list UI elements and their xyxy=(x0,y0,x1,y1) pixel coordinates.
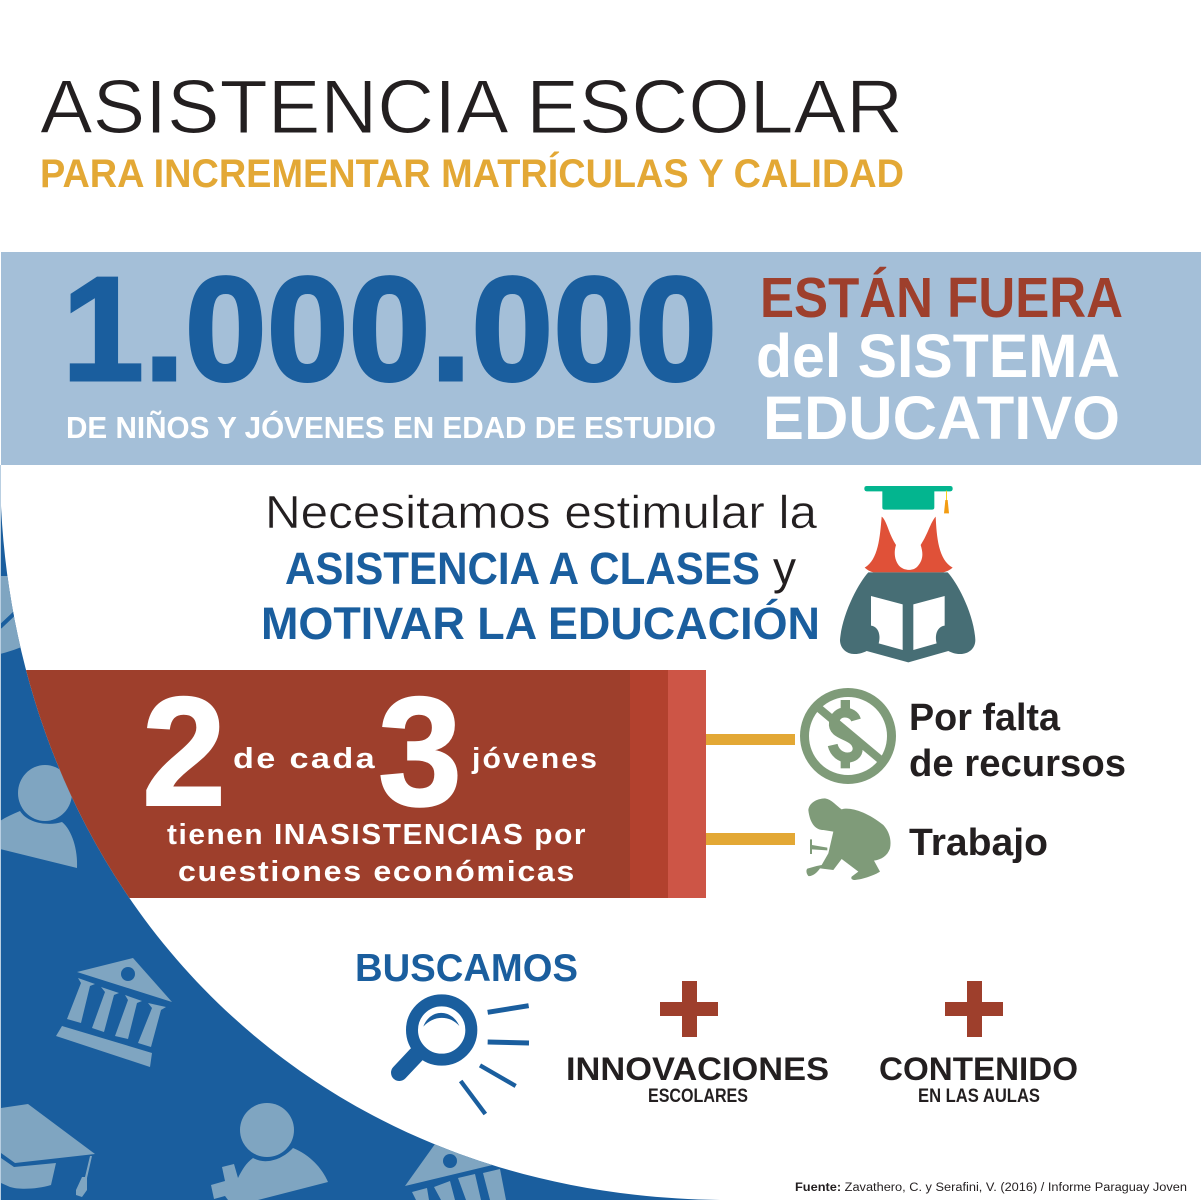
message text block: y xyxy=(773,542,796,594)
panel: two of three youths xyxy=(0,665,706,898)
icon: person left xyxy=(0,765,77,868)
text: por falta de recursos: Por falta xyxy=(909,697,1061,739)
icon: worker xyxy=(806,798,891,880)
band heading: educativo: EDUCATIVO xyxy=(763,384,1120,452)
icon: person with cross xyxy=(211,1103,328,1200)
band caption: DE NIÑOS Y JÓVENES EN EDAD DE ESTUDIO xyxy=(66,409,716,445)
icon: magnifier with rays xyxy=(399,1000,529,1114)
message text block: ASISTENCIA A CLASES xyxy=(285,543,760,594)
icon: graduation cap bottom left xyxy=(1,1104,95,1197)
subtitle: PARA INCREMENTAR MATRÍCULAS Y CALIDAD xyxy=(40,151,904,196)
text: de cada: de cada xyxy=(233,743,377,775)
source note: Fuente: Zavathero, C. y Serafini, V. (2016) / Informe Paraguay Joven xyxy=(795,1182,1187,1194)
message text block: Necesitamos estimular la xyxy=(265,486,817,538)
panel: statistic band xyxy=(1,247,1201,465)
background: blue curved area with icons xyxy=(0,465,740,1200)
text: innovaciones escolares: ESCOLARES xyxy=(648,1086,748,1107)
message text block xyxy=(261,486,820,649)
connector: recursos xyxy=(706,734,795,745)
text: jóvenes: jóvenes xyxy=(471,743,599,775)
text: contenido en las aulas: EN LAS AULAS xyxy=(918,1086,1040,1107)
text: trabajo: Trabajo xyxy=(909,822,1048,864)
title: ASISTENCIA ESCOLAR xyxy=(40,65,903,150)
text: innovaciones escolares xyxy=(566,1051,829,1107)
band heading: están fuera: ESTÁN FUERA xyxy=(760,266,1123,330)
text: cuestiones: cuestiones económicas xyxy=(178,856,576,888)
text: inasistencias: tienen INASISTENCIAS por xyxy=(167,819,587,851)
text: innovaciones escolares: INNOVACIONES xyxy=(566,1051,829,1087)
message text block: MOTIVAR LA EDUCACIÓN xyxy=(261,598,820,649)
text: contenido en las aulas: CONTENIDO xyxy=(879,1051,1078,1087)
icon: graduation cap top left xyxy=(1,576,20,654)
text: por falta de recursos: de recursos xyxy=(909,743,1126,785)
icon: bank bottom xyxy=(405,1144,506,1200)
number 2: 2 xyxy=(142,665,226,838)
heading: buscamos: BUSCAMOS xyxy=(355,947,578,990)
icon: student reading xyxy=(840,486,975,662)
band heading: del sistema: del SISTEMA xyxy=(756,322,1120,390)
icon: plus innovaciones xyxy=(660,981,718,1037)
icon: plus contenido xyxy=(945,981,1003,1037)
connector: trabajo xyxy=(706,833,795,845)
text: contenido en las aulas xyxy=(879,1051,1078,1107)
icon: bank xyxy=(56,958,172,1067)
text: por falta de recursos xyxy=(909,697,1126,785)
big number: 1.000.000 xyxy=(62,247,717,412)
left edge line xyxy=(0,465,1,1200)
number 3: 3 xyxy=(378,665,462,838)
icon: no money xyxy=(804,692,892,780)
